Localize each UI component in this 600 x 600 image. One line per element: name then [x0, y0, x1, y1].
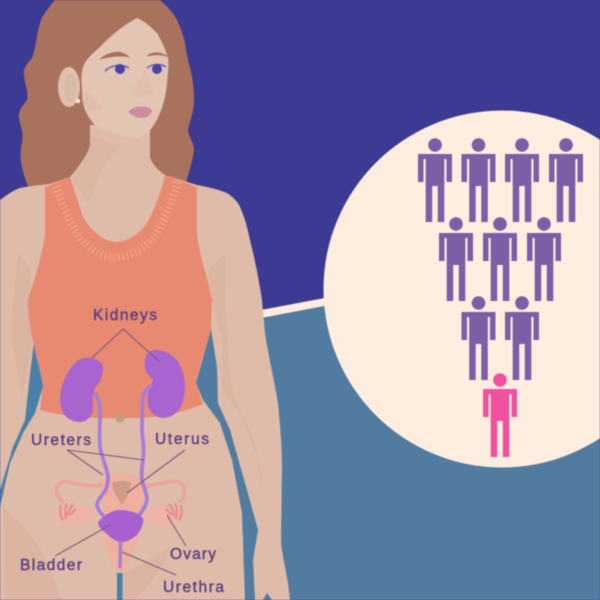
left fimbriae [60, 503, 76, 520]
label: ovary: Ovary [170, 546, 216, 563]
label: kidneys: Kidneys [93, 307, 157, 324]
right ovary [146, 504, 182, 526]
label leader lines [55, 329, 186, 575]
inner ear [64, 74, 76, 102]
leg gap [117, 573, 122, 600]
navel [116, 414, 124, 422]
left kidney [60, 358, 103, 422]
left waist gap [0, 341, 43, 507]
person row 1, 1 [418, 138, 452, 222]
urethra [118, 541, 122, 568]
person row 1, 3 [505, 138, 539, 222]
small gap at wrist [263, 593, 272, 600]
right ureter [139, 385, 152, 515]
neck [70, 125, 165, 242]
horizon stripe [240, 297, 330, 322]
kidneys leader [92, 329, 160, 362]
hair [19, 0, 194, 190]
left ureter [95, 393, 108, 516]
bladder leader [55, 525, 110, 556]
uterus leader [127, 450, 185, 493]
upper thigh shading [3, 507, 172, 600]
woman figure [0, 0, 290, 600]
uterus inner [112, 481, 131, 505]
nose [131, 70, 153, 97]
person row 3, 2 [505, 296, 539, 380]
cheek blush [83, 90, 102, 111]
person row 2, 3 [527, 217, 561, 301]
urinary and reproductive diagram [55, 350, 185, 573]
label: urethra: Urethra [163, 579, 224, 596]
panel: statistic circle [324, 110, 600, 468]
body and arms [0, 175, 290, 600]
left arm shading [11, 253, 33, 400]
person row 3, 1 [462, 296, 496, 380]
face [81, 18, 168, 138]
person row 1, 2 [462, 138, 496, 222]
right fimbriae [166, 503, 182, 520]
bladder [98, 510, 143, 542]
label: uterus: Uterus [155, 431, 209, 448]
uterus outer [101, 473, 146, 517]
person row 2, 2 [483, 217, 517, 301]
pictogram: purple people [418, 138, 583, 380]
right eye [147, 64, 166, 74]
person row 1, 4 [549, 138, 583, 222]
ovary leader [167, 515, 186, 546]
right arm shading [208, 253, 263, 497]
right waist gap [196, 329, 258, 600]
neck shadow [72, 136, 122, 203]
urethra leader [122, 552, 176, 575]
fallopian tubes [56, 481, 185, 503]
left eye [105, 64, 129, 76]
label: bladder: Bladder [20, 557, 82, 574]
pictogram: pink person [483, 373, 517, 457]
ureters leader [67, 450, 144, 475]
ear [58, 67, 80, 107]
background: ground [0, 306, 600, 600]
earring [76, 99, 80, 103]
left eyebrow [100, 52, 129, 59]
tank top [28, 175, 212, 418]
circle background [324, 110, 600, 468]
label: ureters: Ureters [31, 432, 91, 449]
organ labels [20, 307, 224, 596]
right kidney [145, 350, 185, 418]
left ovary [55, 504, 93, 526]
person row 2, 1 [439, 217, 473, 301]
right eyebrow [147, 53, 169, 57]
neckline ribbing [55, 180, 178, 257]
vulva area [103, 535, 140, 573]
lips [128, 107, 152, 118]
